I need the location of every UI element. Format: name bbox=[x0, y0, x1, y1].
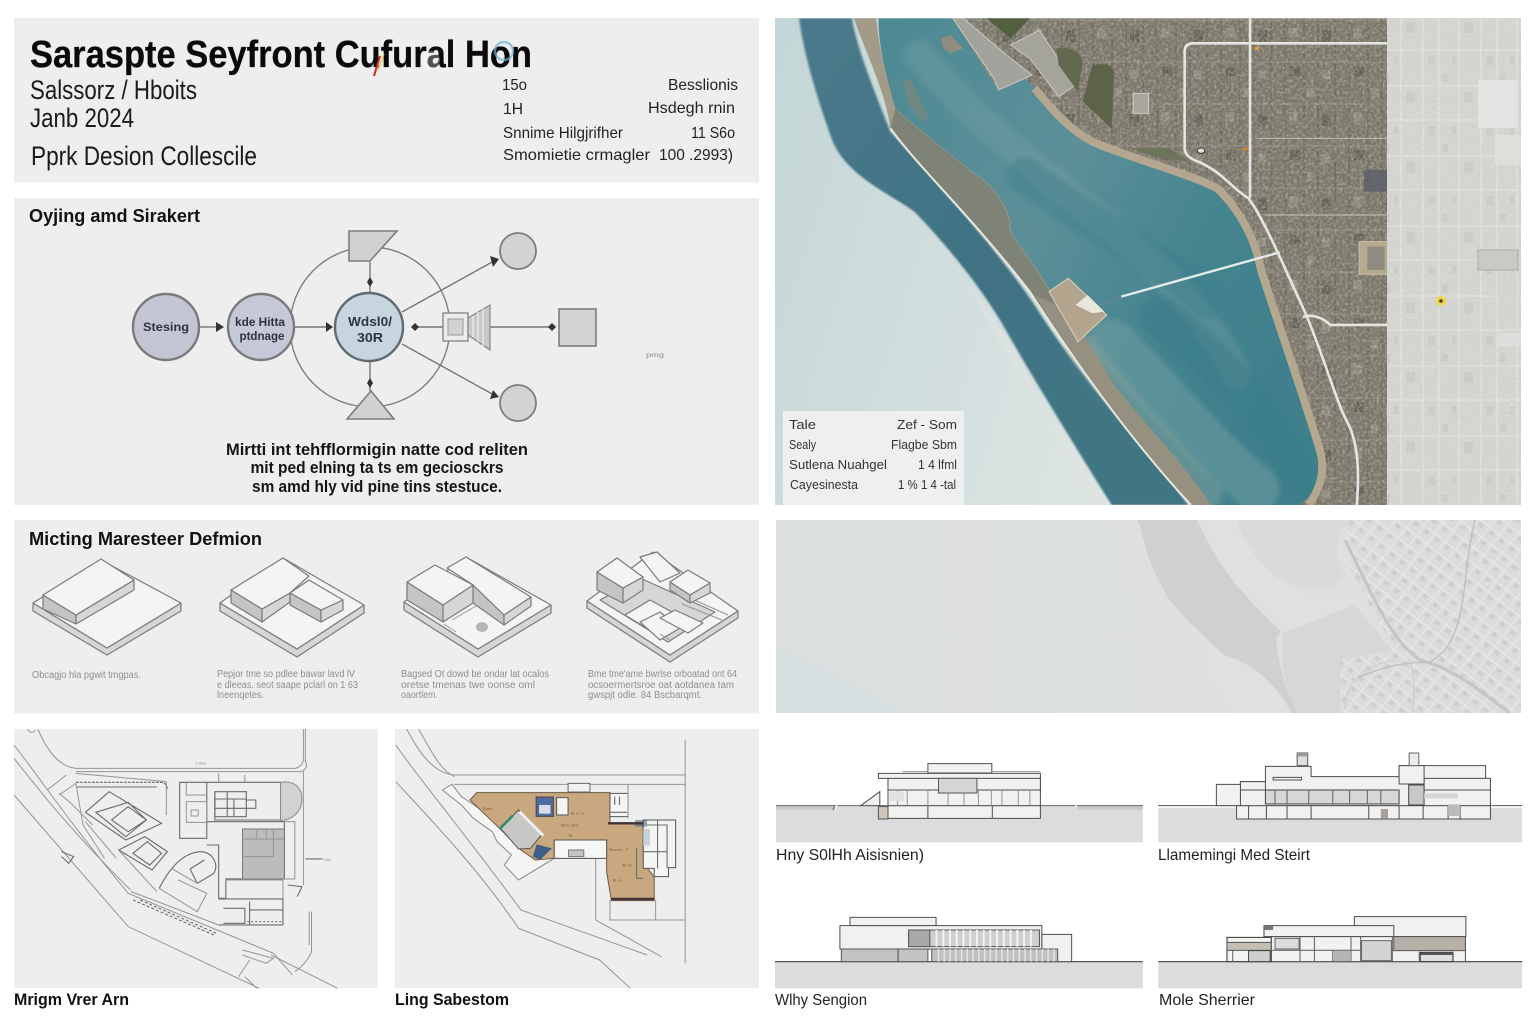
ground bbox=[1158, 808, 1522, 842]
massing captions: e dleeas. seot saape pclarl on 1 63 bbox=[217, 680, 358, 691]
diagram caption: mit ped elning ta ts em geciosckrs bbox=[250, 458, 504, 477]
wall strip bbox=[608, 823, 654, 899]
map data box: 1 % 1 4 -tal bbox=[898, 477, 956, 492]
barrier sand bbox=[854, 18, 1210, 505]
central courtyard bbox=[554, 840, 607, 858]
grey hall bbox=[500, 810, 541, 849]
room labels: B n o bbox=[571, 811, 585, 816]
building masses bbox=[1354, 917, 1466, 937]
room labels: Brs ats bbox=[560, 823, 579, 828]
node: start bbox=[133, 294, 199, 360]
faded city texture bbox=[1340, 518, 1521, 713]
wood floor bbox=[470, 793, 654, 901]
map data box: Zef - Som bbox=[897, 417, 957, 432]
project data table: Hsdegh rnin bbox=[648, 100, 735, 117]
pier bridge bbox=[1121, 252, 1280, 297]
lagoon bbox=[878, 18, 1322, 505]
ground bbox=[775, 962, 1143, 988]
blue rooms bbox=[536, 797, 553, 816]
below ground bbox=[888, 806, 1040, 818]
port sheds bbox=[953, 18, 1032, 90]
project data table: Besslionis bbox=[668, 77, 738, 94]
ground bbox=[776, 806, 1143, 842]
open ocean bbox=[775, 18, 1387, 505]
faded shore detail bbox=[1138, 520, 1398, 713]
roads bbox=[1185, 18, 1390, 505]
section drawing 4 bbox=[1158, 917, 1522, 988]
massing captions: Obcagjo hla pgwit tmgpas. bbox=[32, 670, 141, 681]
diagram caption bbox=[226, 440, 528, 496]
massing captions: oaortlem. bbox=[401, 690, 438, 701]
massing step 2 bbox=[220, 558, 364, 657]
section drawing 1 bbox=[776, 764, 1143, 842]
coloured markers bbox=[1197, 47, 1259, 153]
node: start: Stesing bbox=[143, 320, 189, 334]
base bbox=[1237, 806, 1490, 819]
node: middle: ptdnage bbox=[240, 329, 285, 343]
room labels: Bano, 7 bbox=[609, 848, 629, 853]
map data box: Sutlena Nuahgel bbox=[789, 457, 887, 472]
map data box: Cayesinesta bbox=[790, 477, 859, 492]
node: middle: kde Hitta bbox=[235, 315, 285, 329]
project data table: Snnime Hilgjrifher bbox=[503, 125, 624, 142]
room labels: B o bbox=[613, 878, 622, 883]
node: bottom triangle bbox=[347, 391, 394, 419]
subtitle lines: Janb 2024 bbox=[30, 103, 134, 133]
mud flat bbox=[902, 78, 929, 122]
node: funnel device bbox=[443, 305, 490, 350]
massing captions bbox=[32, 669, 737, 701]
lagoon and barrier bbox=[854, 18, 1390, 505]
ramp bbox=[861, 792, 880, 806]
panel: title block bbox=[14, 18, 759, 182]
project data table: 1H bbox=[503, 101, 523, 118]
heading: Micting Marestеer Defmion bbox=[29, 528, 262, 549]
walkway bbox=[442, 784, 554, 880]
city block base bbox=[953, 18, 1390, 505]
panel: ground plan bbox=[395, 729, 759, 988]
map data box: Tale bbox=[789, 417, 816, 432]
subtitle lines: Pprk Desion Collescile bbox=[31, 141, 257, 171]
panel: faded context map bbox=[776, 518, 1521, 718]
massing captions: ocsoermertsroe oat aotdanea tam bbox=[588, 680, 734, 691]
subtitle lines: Salssorz / Hboits bbox=[30, 75, 197, 105]
massing captions: Bagsed Ot dowd be ondar lat ocalos bbox=[401, 669, 549, 680]
diagram caption: Mirtti int tehfflormigin natte cod reliten bbox=[226, 440, 528, 459]
section caption 1: Hny S0lHh Aisisnien) bbox=[776, 847, 924, 864]
section drawing 2 bbox=[1158, 753, 1522, 842]
subtitle lines bbox=[30, 75, 257, 171]
title colour glints bbox=[374, 42, 513, 76]
room labels: Ban bbox=[483, 807, 493, 812]
heading: Oyjing amd Sirakert bbox=[29, 205, 200, 226]
lagoon current bands bbox=[919, 55, 1299, 495]
panel: aerial map bbox=[775, 18, 1521, 505]
map data box bbox=[783, 411, 964, 505]
panel: massing definition bbox=[14, 520, 759, 714]
section caption 2: Llamemingi Med Steirt bbox=[1158, 847, 1311, 864]
map data box: Sealy bbox=[789, 437, 816, 452]
location pin bbox=[1436, 296, 1446, 306]
tiny note: pmg bbox=[646, 353, 664, 359]
node: centre bbox=[335, 293, 403, 361]
section caption 4: Mole Sherrier bbox=[1159, 992, 1255, 1009]
site plan linework: Lnxs bbox=[196, 761, 206, 765]
building bbox=[878, 773, 1040, 806]
project data table: 15o bbox=[502, 77, 527, 94]
site plan linework bbox=[14, 729, 338, 988]
map water and coast bbox=[799, 18, 1390, 505]
title: Sarasptе Seyfront Cufural Hon bbox=[30, 34, 532, 76]
lagoon-side sand shoreline bbox=[1035, 88, 1322, 505]
section caption 3: Wlhy Sengion bbox=[775, 992, 867, 1009]
room labels bbox=[483, 807, 632, 883]
massing step 3 bbox=[404, 557, 551, 657]
node: centre: Wdsl0/ bbox=[348, 314, 392, 329]
arrowheads bbox=[216, 256, 556, 399]
project data table: Smomietie crmagler bbox=[503, 147, 651, 164]
upper mass bbox=[1237, 766, 1490, 806]
orbit ring bbox=[290, 247, 450, 407]
ground plan caption: Ling Sabestom bbox=[395, 990, 509, 1009]
node: upper right circle bbox=[500, 233, 536, 269]
panel: site plan bbox=[14, 729, 378, 988]
node: lower right circle bbox=[500, 385, 536, 421]
massing step 4 bbox=[587, 552, 738, 662]
project data table bbox=[502, 77, 738, 164]
massing step 1 bbox=[33, 559, 181, 655]
ground plan drawing bbox=[396, 729, 685, 988]
site plan linework: Ctd bbox=[323, 858, 332, 862]
massing captions: lneenqetes. bbox=[217, 690, 264, 701]
building masses bbox=[850, 917, 936, 926]
massing captions: Bme tme'ame bwrlse orboatad ont 64 bbox=[588, 669, 737, 680]
node: right square bbox=[559, 309, 596, 346]
inland landmarks bbox=[1359, 242, 1388, 274]
project data table: 100 .2993) bbox=[659, 147, 733, 164]
diagram bbox=[133, 231, 664, 421]
ground bbox=[1158, 962, 1522, 988]
service rooms bbox=[610, 793, 628, 817]
city street grid bbox=[950, 18, 1387, 505]
room labels: B bbox=[569, 833, 573, 838]
node: top shape bbox=[349, 231, 397, 261]
connectors bbox=[200, 261, 553, 395]
map data box: Flagbe Sbm bbox=[891, 437, 957, 452]
pier building bbox=[1049, 278, 1107, 342]
vertical fins bbox=[909, 930, 1039, 947]
light city map strip bbox=[1387, 18, 1521, 505]
section drawing 3 bbox=[775, 917, 1143, 988]
room labels: B G bbox=[622, 863, 632, 868]
glazing bbox=[1265, 790, 1399, 804]
node: middle bbox=[228, 294, 294, 360]
plan caption: Mrigm Vrer Arn bbox=[14, 990, 129, 1009]
islet bbox=[941, 35, 963, 53]
massing captions: Pepjor tme so pdlee bawar lavd lV bbox=[217, 669, 355, 680]
panel: opening and site diagram bbox=[14, 198, 759, 505]
massing captions: gwspjt odle. 84 Bscbarqmt. bbox=[588, 690, 702, 701]
diagram caption: sm amd hly vid pine tins stestuce. bbox=[252, 477, 502, 496]
project data table: 11 S6o bbox=[691, 125, 735, 142]
node: centre: 30R bbox=[357, 330, 384, 345]
massing captions: oretse tmenas twe oonse oml bbox=[401, 680, 535, 691]
map data box: 1 4 lfml bbox=[918, 457, 957, 472]
